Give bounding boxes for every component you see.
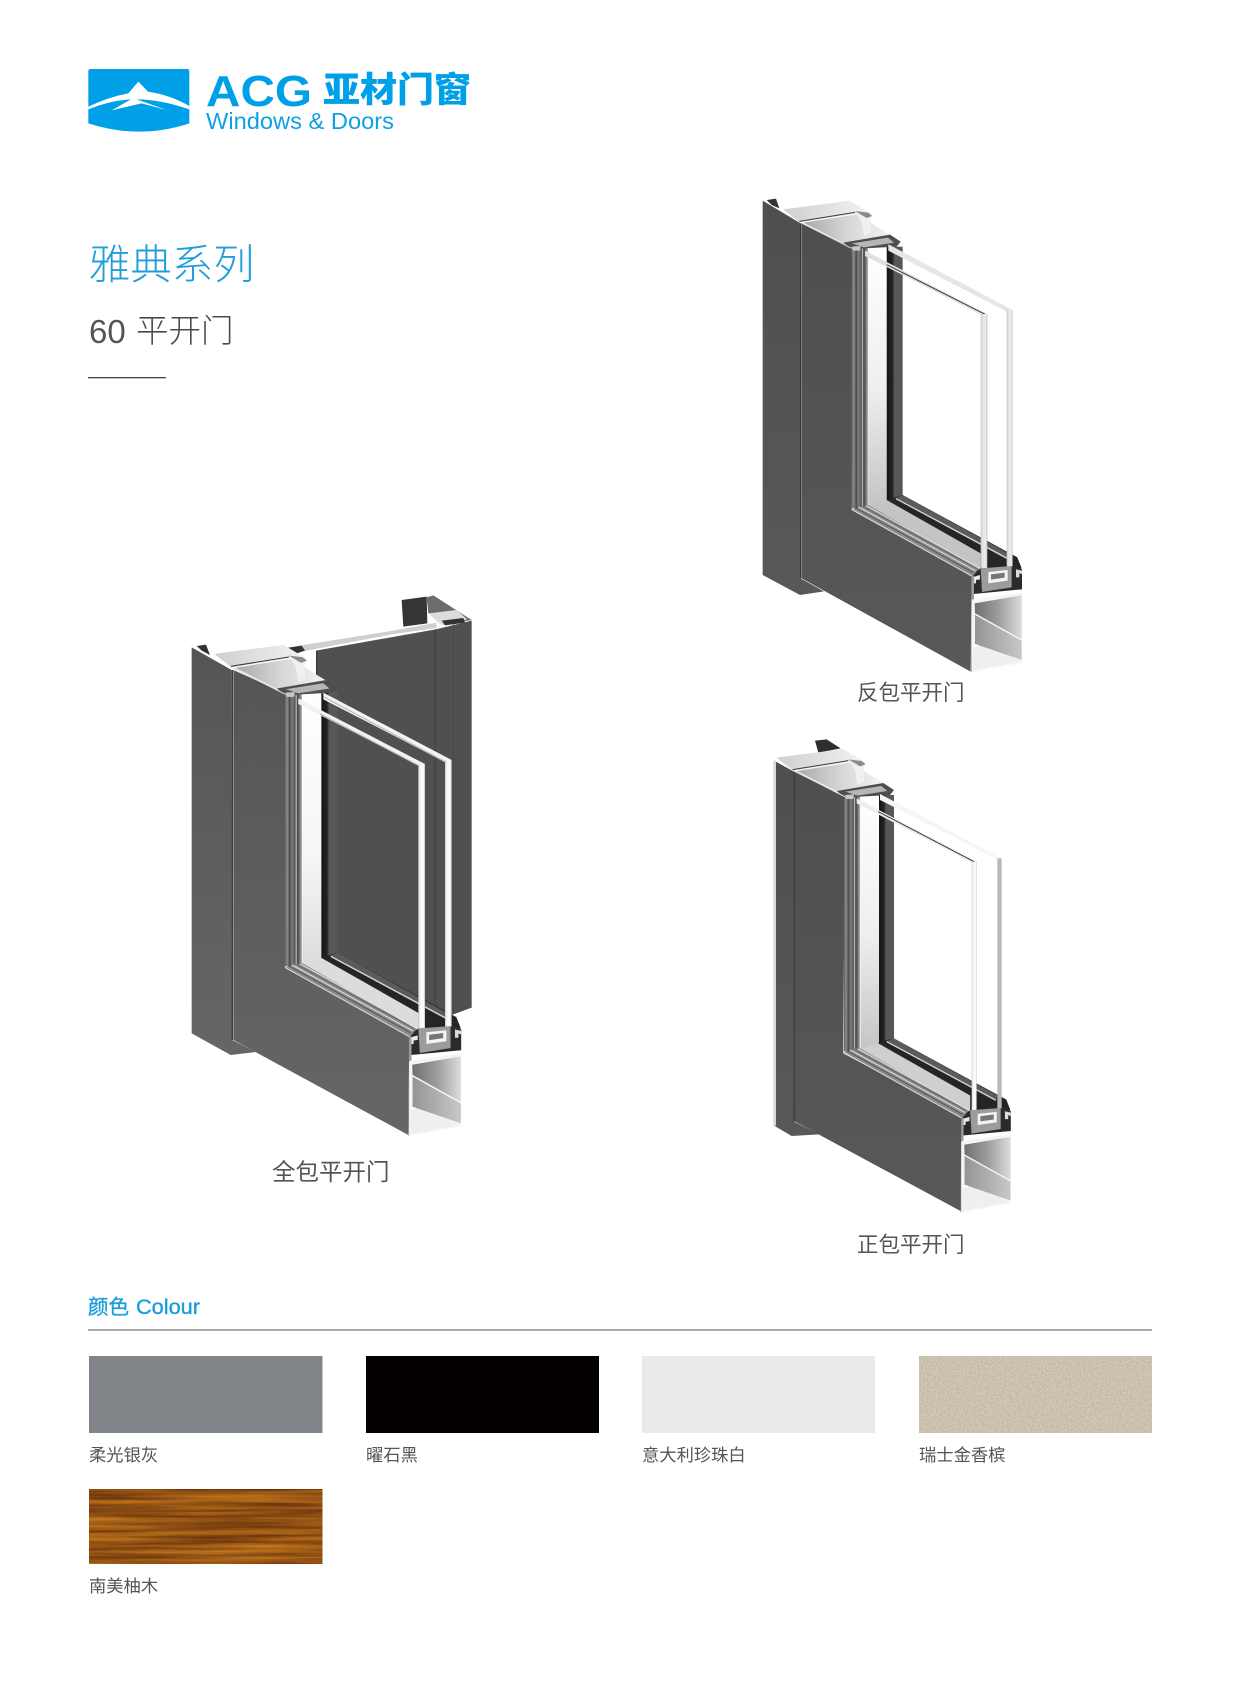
swatch: 柔光银灰: [89, 1356, 322, 1466]
glass panes: [857, 794, 1002, 1115]
sill section: [971, 566, 1022, 672]
title: series name: 雅典系列: [89, 231, 255, 291]
logo: ACG Windows & Doors: [88, 62, 471, 134]
swatch: 曜石黑: 曜石黑: [366, 1441, 418, 1466]
logo wordmark ACG: ACG: [206, 67, 312, 116]
left column: [763, 201, 824, 595]
front face: [795, 772, 963, 1212]
door profile: 正包平开门: [773, 739, 1011, 1212]
door profile: 反包平开门: [763, 199, 1022, 672]
front face: [802, 223, 972, 672]
subtitle: 60 casement door: 平开门: [136, 305, 234, 352]
sill section: [408, 1026, 461, 1136]
swatch: 意大利珍珠白: [642, 1356, 875, 1466]
rear profile: [815, 739, 841, 753]
front face: [233, 670, 409, 1135]
caption: 全包平开门: 全包平开门: [272, 1153, 390, 1187]
swatch: 南美柚木: [89, 1489, 322, 1597]
subtitle: 60 casement door: [89, 305, 234, 352]
sill section: [961, 1108, 1011, 1212]
left column: [192, 647, 256, 1055]
swatch: 南美柚木: 南美柚木: [89, 1572, 158, 1597]
caption: 反包平开门: 反包平开门: [857, 676, 965, 707]
swatch: 柔光银灰: 柔光银灰: [89, 1441, 158, 1466]
swatch: 瑞士金香槟: 瑞士金香槟: [919, 1441, 1005, 1466]
swatch: 曜石黑: [366, 1356, 599, 1466]
back wall: [283, 595, 472, 1015]
logo mark: [88, 69, 189, 132]
window reveal strips: [852, 247, 903, 508]
logo tagline: Windows & Doors: [206, 108, 394, 134]
glass panes: [298, 693, 452, 1034]
glass panes: [865, 244, 1013, 573]
colour section heading: [88, 1290, 200, 1320]
swatch: 意大利珍珠白: 意大利珍珠白: [642, 1441, 746, 1466]
window reveal strips: [285, 692, 338, 966]
door profile: 全包平开门: [192, 595, 472, 1136]
colour section heading: Colour: [136, 1295, 200, 1319]
logo Chinese name: 亚材门窗: [323, 62, 471, 113]
window reveal strips: [844, 795, 894, 1051]
left column: [774, 761, 819, 1136]
subtitle: 60 casement door: 60: [89, 313, 126, 350]
colour section heading: 颜色: [88, 1290, 129, 1320]
swatch: 瑞士金香槟: [919, 1356, 1152, 1466]
caption: 正包平开门: 正包平开门: [857, 1228, 965, 1259]
